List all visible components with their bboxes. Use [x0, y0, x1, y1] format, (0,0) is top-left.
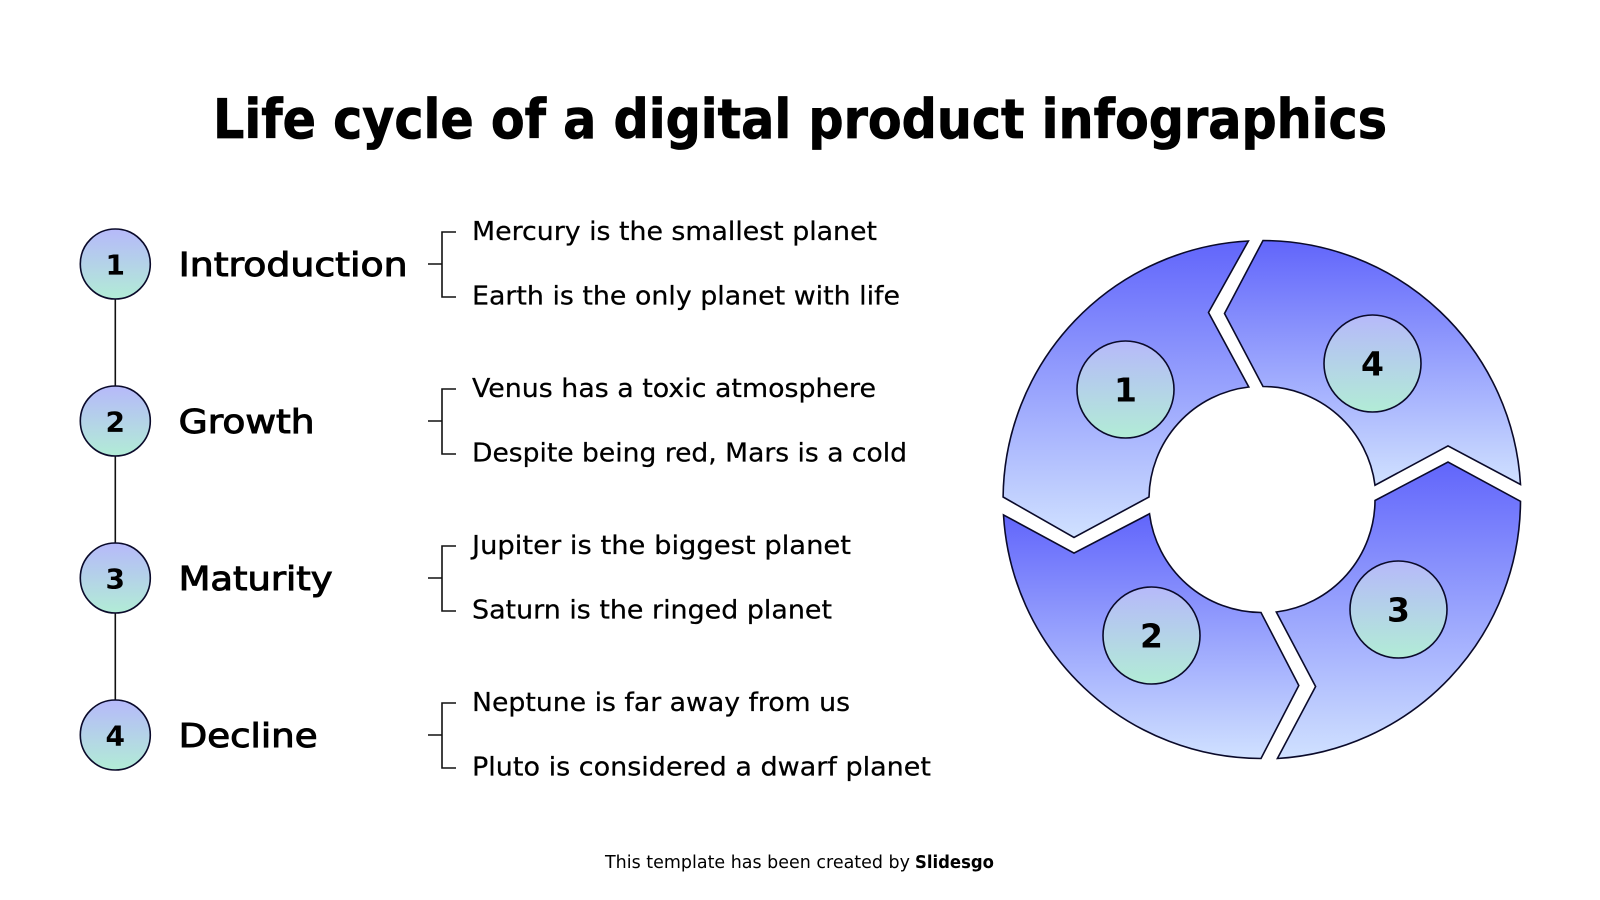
- stage 1 row: [80, 217, 900, 312]
- stage 1 row: Introduction: [179, 245, 408, 284]
- stage 4 row: Pluto is considered a dwarf planet: [472, 752, 931, 782]
- segment 2: 2: [1140, 616, 1163, 656]
- segment 2: [1004, 514, 1299, 758]
- stage 3 row: Jupiter is the biggest planet: [470, 531, 851, 561]
- stage 3 row: Maturity: [179, 559, 333, 598]
- stage 4 row: [80, 688, 931, 782]
- stage 3 row: 3: [106, 562, 125, 596]
- title: Life cycle of a digital product infographics: [213, 88, 1387, 151]
- stage 2 row: Venus has a toxic atmosphere: [472, 374, 876, 404]
- stage 1 row: Mercury is the smallest planet: [472, 217, 877, 247]
- stage 1 row: Earth is the only planet with life: [472, 282, 900, 312]
- segment 3: 3: [1387, 590, 1410, 630]
- segment 1: [1003, 241, 1249, 538]
- stage 2 row: 2: [106, 406, 125, 438]
- segment 4: 4: [1361, 344, 1384, 384]
- stage 2 row: [80, 374, 907, 468]
- stage 4 row: Neptune is far away from us: [472, 688, 850, 718]
- cycle diagram: [1003, 240, 1520, 758]
- stage 2 row: Despite being red, Mars is a cold: [472, 438, 907, 468]
- stage 1 row: 1: [106, 248, 125, 282]
- segment 3: [1276, 462, 1520, 758]
- stage 2 row: Growth: [179, 402, 315, 441]
- segment 1: 1: [1114, 370, 1137, 410]
- stage 4 row: Decline: [179, 716, 318, 755]
- stage 4 row: 4: [106, 720, 125, 752]
- panel: stage list: [80, 217, 931, 782]
- stage 3 row: [80, 531, 851, 626]
- stage 3 row: Saturn is the ringed planet: [472, 596, 832, 626]
- segment 4: [1224, 240, 1520, 485]
- timeline connector: [114, 264, 116, 735]
- footer credit: This template has been created by: [604, 853, 910, 873]
- footer credit: Slidesgo: [915, 853, 994, 873]
